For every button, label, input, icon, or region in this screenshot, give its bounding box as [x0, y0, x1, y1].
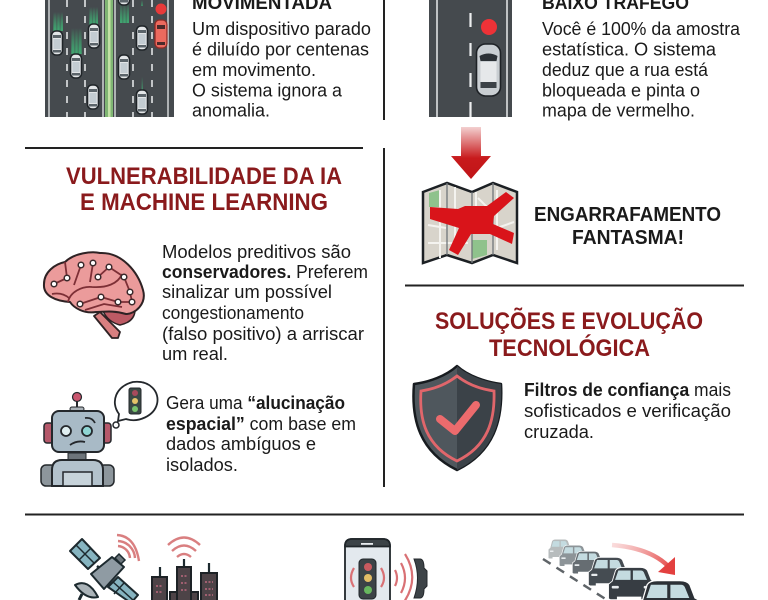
icon: phone with traffic light: [345, 539, 427, 600]
icon: line of cars with curved arrow: [543, 539, 699, 600]
text: predictive models: Modelos preditivos são: [162, 242, 351, 262]
text: low traffic road: [542, 0, 741, 121]
text: busy road: em movimento.: [192, 60, 316, 80]
text: busy road: é diluído por centenas: [192, 40, 369, 60]
text: low traffic road: Você é 100% da amostra: [542, 19, 741, 39]
heading: solutions: SOLUÇÕES E EVOLUÇÃO: [435, 307, 703, 335]
text: predictive models: (falso positivo) a arriscar: [162, 324, 364, 344]
text: spatial hallucination: [166, 393, 356, 475]
text: low traffic road: bloqueada e pinta o: [542, 81, 700, 101]
text: spatial hallucination: Gera uma “alucinação: [166, 393, 345, 413]
text: predictive models: sinalizar um possível: [162, 282, 332, 302]
text: predictive models: congestionamento: [162, 303, 304, 323]
text: spatial hallucination: espacial” com base em: [166, 414, 356, 434]
text: busy road: Um dispositivo parado: [192, 19, 371, 39]
text: spatial hallucination: dados ambíguos e: [166, 434, 316, 454]
callout: phantom jam: [534, 204, 721, 249]
text: confidence filters: cruzada.: [524, 422, 594, 442]
arrow: down to map: [451, 127, 491, 179]
text: predictive models: um real.: [162, 344, 228, 364]
heading: AI vulnerability: E MACHINE LEARNING: [80, 189, 328, 216]
text: predictive models: [162, 242, 368, 364]
text: confidence filters: [524, 380, 731, 442]
text: busy road: anomalia.: [192, 101, 270, 121]
icon: map with red jam: [423, 183, 517, 263]
text: busy road: [192, 0, 371, 121]
text: spatial hallucination: isolados.: [166, 455, 238, 475]
text: low traffic road: mapa de vermelho.: [542, 101, 695, 121]
icon: shield with check: [413, 366, 501, 470]
callout: phantom jam: FANTASMA!: [572, 227, 684, 249]
text: predictive models: conservadores. Preferem: [162, 262, 368, 282]
illustration: busy highway: [45, 0, 174, 117]
heading: AI vulnerability: VULNERABILIDADE DA IA: [66, 163, 342, 190]
text: confidence filters: sofisticados e verificação: [524, 401, 731, 421]
heading: AI vulnerability: [66, 163, 342, 216]
icon: satellite and city: [70, 535, 217, 600]
icon: confused robot: [41, 382, 158, 486]
illustration: empty road: [429, 0, 512, 117]
text: low traffic road: deduz que a rua está: [542, 60, 709, 80]
heading: solutions: TECNOLÓGICA: [489, 334, 650, 362]
text: confidence filters: Filtros de confiança mais: [524, 380, 731, 400]
text: busy road: O sistema ignora a: [192, 81, 343, 101]
text: low traffic road: estatística. O sistema: [542, 40, 717, 60]
callout: phantom jam: ENGARRAFAMENTO: [534, 204, 721, 226]
heading: solutions: [435, 307, 703, 362]
icon: brain: [44, 252, 144, 338]
